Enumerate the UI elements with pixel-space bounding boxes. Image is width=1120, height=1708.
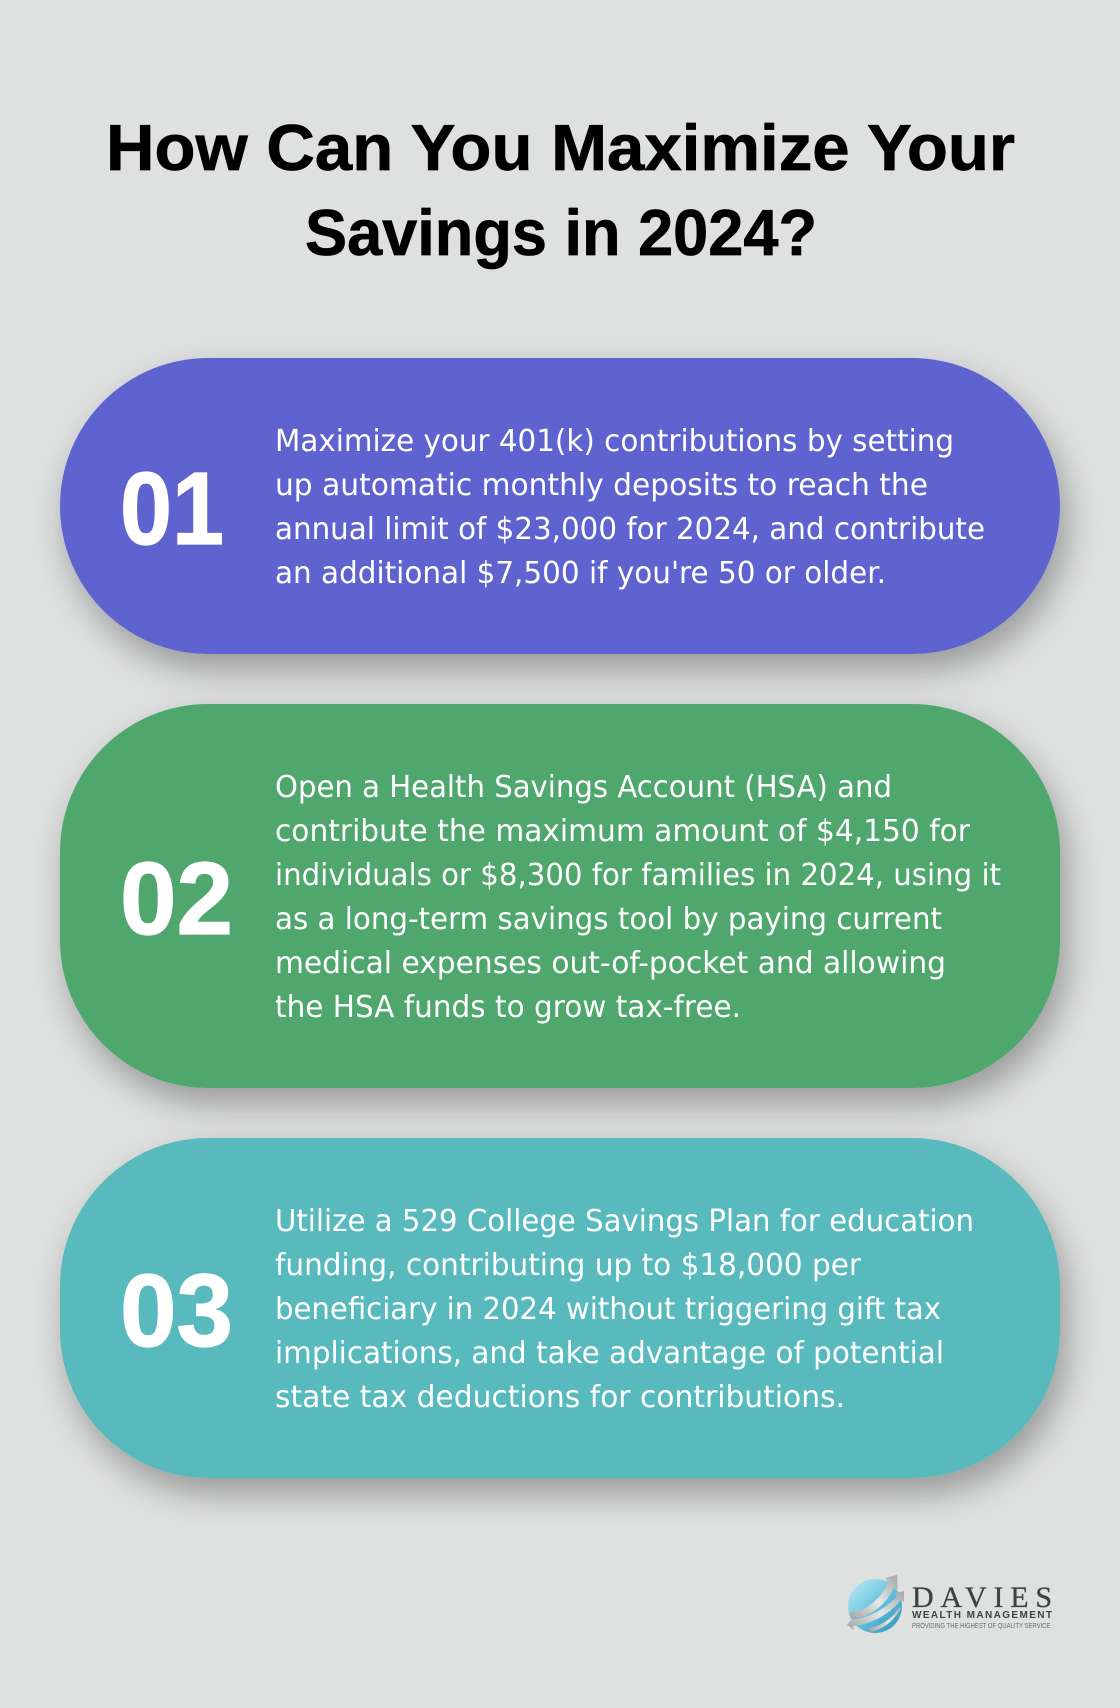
logo: Davies Wealth Management [847, 1575, 1052, 1633]
text: step 02 description: contribute the maximum amount of $4,150 for [275, 814, 971, 849]
text: step 02 description: medical expenses out-of-pocket and allowing [275, 946, 946, 981]
text: step 01 description: annual limit of $23,000 for 2024, and contribute [275, 512, 985, 547]
panel: step 01 [60, 358, 1060, 654]
pill background 03 [60, 1138, 1060, 1478]
text: step 01 description: Maximize your 401(k) contributions by setting [275, 424, 954, 459]
text: step 02 description: as a long-term savings tool by paying current [275, 902, 942, 937]
number 03: 03 [120, 1253, 233, 1368]
panel: step 02 [60, 704, 1060, 1088]
text: step 02 description [275, 770, 1001, 1025]
text: step 01 description: an additional $7,500 if you're 50 or older. [275, 556, 886, 591]
pill background 01 [60, 358, 1060, 654]
logo subtitle: WEALTH MANAGEMENT [912, 1610, 1052, 1621]
logo tagline: PROVIDING THE HIGHEST OF QUALITY SERVICE. [912, 1623, 1052, 1630]
text: step 02 description: Open a Health Savings Account (HSA) and [275, 770, 892, 805]
logo name: DAVIES [912, 1581, 1052, 1614]
number 01: 01 [120, 451, 224, 566]
text: step 03 description: beneficiary in 2024 without triggering gift tax [275, 1292, 941, 1327]
title: How Can You Maximize Your [106, 111, 1015, 184]
text: step 03 description: Utilize a 529 College Savings Plan for education [275, 1204, 974, 1239]
number 02: 02 [120, 841, 233, 956]
text: step 02 description: individuals or $8,300 for families in 2024, using it [275, 858, 1001, 893]
text: step 01 description [275, 424, 985, 591]
title: Savings in 2024? [305, 196, 817, 269]
text: step 03 description: implications, and take advantage of potential [275, 1336, 944, 1371]
text: step 03 description: state tax deductions for contributions. [275, 1380, 845, 1415]
icon: globe with arrows [847, 1575, 904, 1633]
panel: step 03 [60, 1138, 1060, 1478]
text: step 02 description: the HSA funds to grow tax-free. [275, 990, 741, 1025]
title [106, 111, 1015, 269]
text: step 03 description [275, 1204, 974, 1415]
text: step 01 description: up automatic monthly deposits to reach the [275, 468, 928, 503]
pill background 02 [60, 704, 1060, 1088]
text: step 03 description: funding, contributing up to $18,000 per [275, 1248, 862, 1283]
